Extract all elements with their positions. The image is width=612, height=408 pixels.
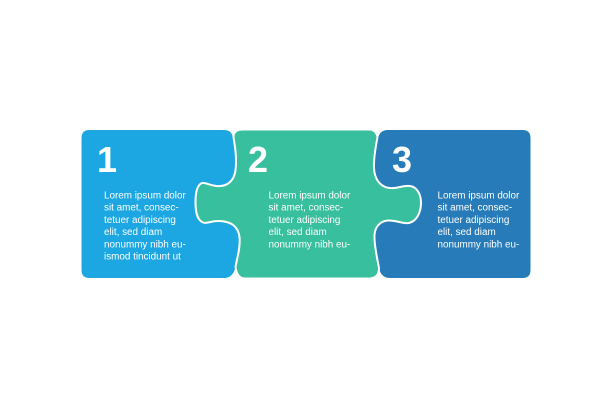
number 1: 1 [97, 139, 117, 180]
text block 2: tetuer adipiscing [268, 215, 340, 226]
text block 1: Lorem ipsum dolor [104, 190, 186, 202]
text block 3: nonummy nibh eu- [438, 239, 519, 250]
number 2: 2 [248, 139, 268, 180]
number 3: 3 [392, 139, 412, 180]
panel: step 2 [196, 130, 421, 278]
text block 2: elit, sed diam [268, 227, 327, 238]
text block 3: elit, sed diam [438, 227, 496, 238]
text block 2: nonummy nibh eu- [268, 239, 350, 250]
text block 2: sit amet, consec- [268, 203, 343, 214]
text block 1: nonummy nibh eu- [104, 239, 186, 250]
panel: step 3 [374, 130, 530, 278]
text block 2: Lorem ipsum dolor [268, 190, 351, 202]
puzzle piece 2 [196, 130, 421, 278]
text block 3: Lorem ipsum dolor [438, 190, 520, 202]
text block 1: elit, sed diam [104, 227, 162, 238]
text block 1: tetuer adipiscing [104, 215, 176, 226]
puzzle piece 3 [374, 130, 530, 278]
text block 3: tetuer adipiscing [438, 215, 509, 226]
text block 1: sit amet, consec- [104, 203, 179, 214]
text block 1: ismod tincidunt ut [104, 252, 181, 262]
panel: step 1 [82, 130, 240, 278]
text block 3: sit amet, consec- [438, 203, 512, 214]
puzzle piece 1 [82, 130, 240, 278]
